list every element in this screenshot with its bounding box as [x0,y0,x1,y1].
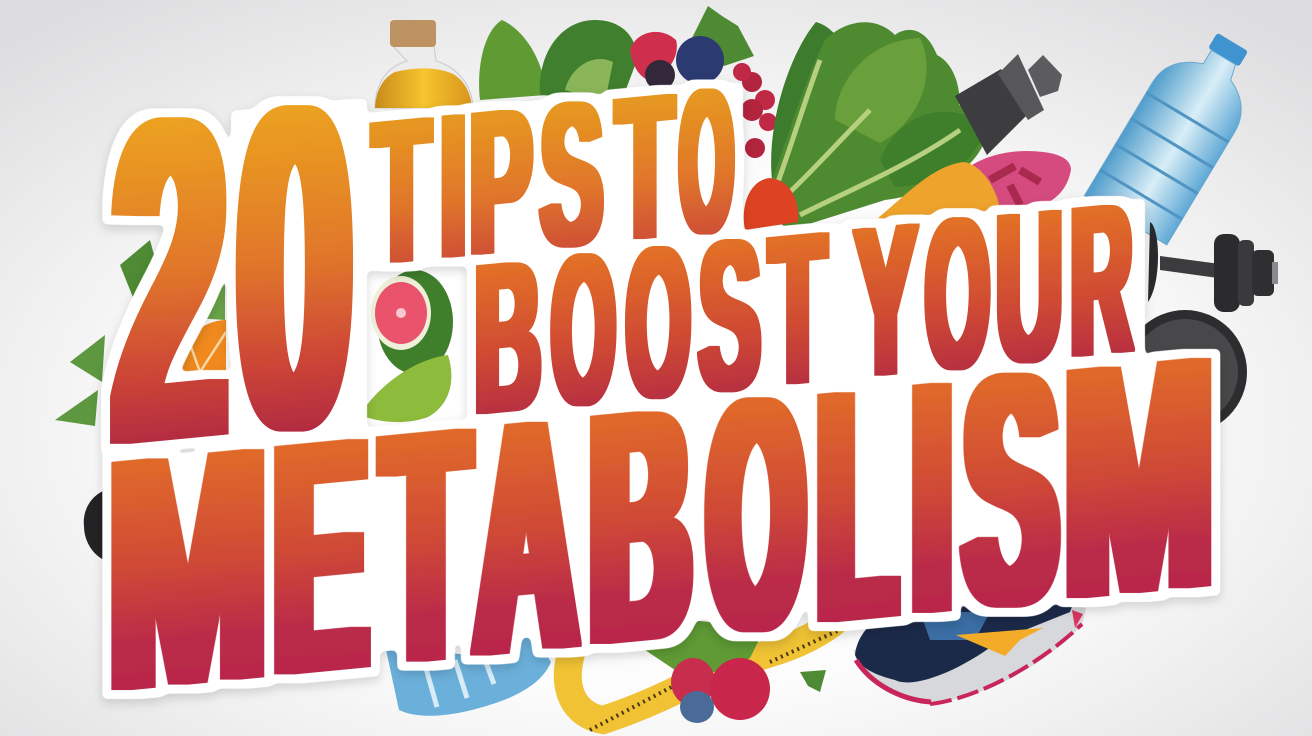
icon: weight plate [1123,310,1247,434]
heading: TIPS TO: TIPS TO [373,48,733,307]
icon: olive oil bottle [375,20,473,108]
icon: grapefruit half [371,270,453,374]
number: 20: 20 [113,7,351,539]
icon: orange slice [172,320,226,380]
icon: dark sports bottle [955,54,1062,155]
heading: BOOST YOUR: BOOST YOUR [475,158,1132,459]
white ground behind fruit [362,262,480,432]
icon: blue bottle bottom [385,617,551,716]
icon: top greens and berries [479,6,777,158]
icon: big spinach leaves [760,22,985,230]
icon: dumbbell [1148,222,1278,312]
icon: pink grapefruit [968,151,1071,212]
icon: measuring tape [568,615,850,730]
icon: lime [360,355,451,422]
icon: left wheel [84,488,112,562]
icon: tomato [744,178,798,230]
icon: yellow squash [878,162,1000,223]
icon: running shoe [854,596,1086,704]
icon: water bottle [1084,17,1274,245]
icon: bottom greens and raspberries [645,620,826,723]
icon: left leaves [55,240,225,426]
